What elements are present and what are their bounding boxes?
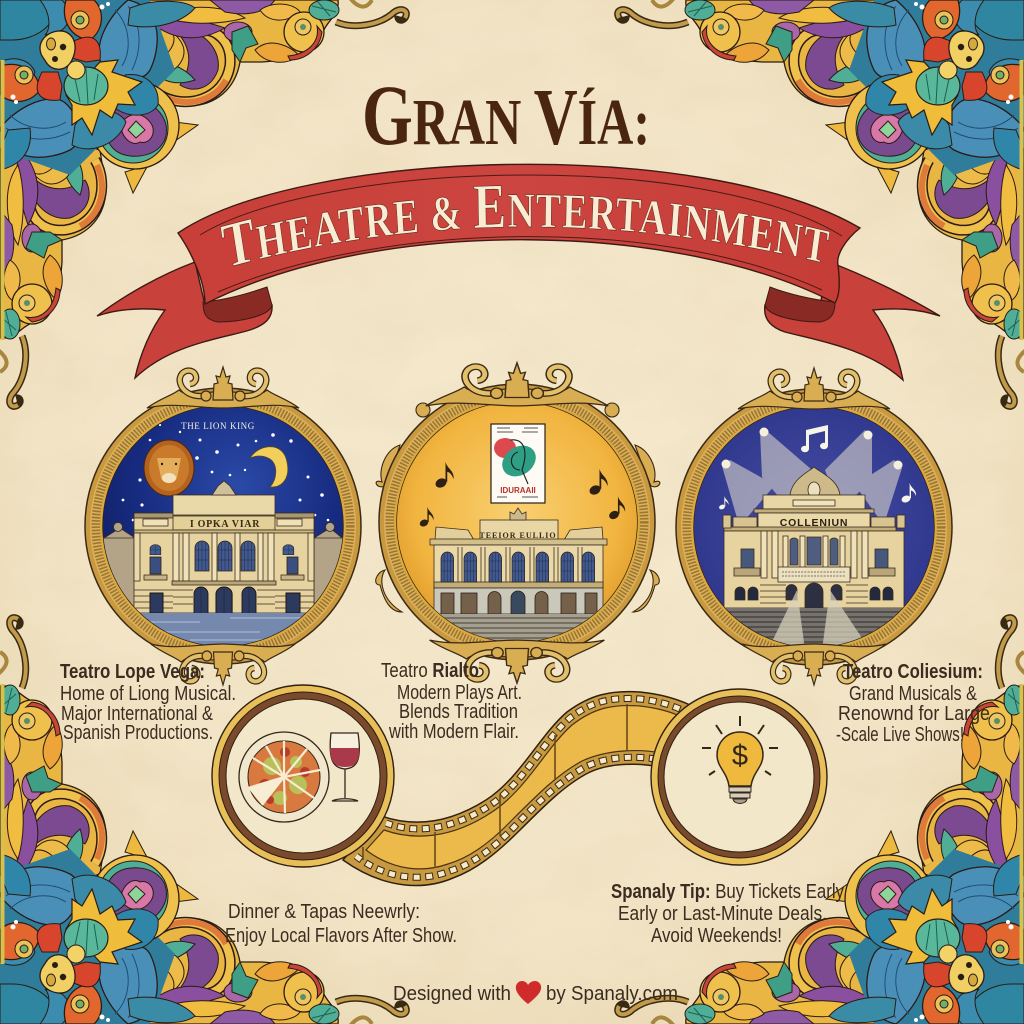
text: Teatro Lope Vega: Spanish Productions. bbox=[63, 722, 213, 744]
text: Teatro Rialto: with Modern Flair. bbox=[388, 721, 519, 743]
text: Teatro Coliesium: Renownd for Large bbox=[838, 703, 990, 725]
text: dinner and tapas: Dinner & Tapas Neewrly: bbox=[228, 901, 420, 923]
footer credit bbox=[393, 981, 678, 1005]
ornament: bottom-right corner bbox=[618, 618, 1024, 1024]
banner: main band bbox=[178, 164, 860, 304]
facade sign: TEEIOR EULLIO bbox=[479, 531, 557, 540]
footer credit: Designed with bbox=[393, 983, 511, 1005]
scene: amber sky with poster and theatre bbox=[395, 400, 640, 649]
text: Teatro Coliesium: Grand Musicals & bbox=[849, 683, 978, 705]
text: Spanaly tip: Early or Last-Minute Deals. bbox=[618, 903, 827, 925]
white music notes bbox=[718, 425, 916, 510]
side buildings bbox=[100, 522, 349, 613]
forecourt bbox=[140, 613, 306, 644]
crown bottom bbox=[430, 640, 604, 683]
stairs bbox=[440, 614, 594, 640]
text: Teatro Coliesium: -Scale Live Shows! bbox=[836, 724, 964, 746]
text: Spanaly tip: Avoid Weekends! bbox=[651, 925, 782, 947]
stairs and light bbox=[726, 590, 902, 645]
text: Teatro Lope Vega bbox=[60, 661, 236, 744]
crown top bbox=[426, 363, 608, 406]
medallion: Teatro Rialto bbox=[376, 363, 660, 683]
crown bottom bbox=[742, 644, 886, 685]
icon: pizza plate bbox=[239, 732, 329, 822]
scene: lion king night sky and theatre bbox=[103, 408, 343, 644]
banner: right tail bbox=[765, 262, 940, 380]
icon: dollar light bulb bbox=[702, 716, 778, 804]
medallion: Teatro Lope de Vega bbox=[85, 367, 361, 685]
text: Teatro Lope Vega: Home of Liong Musical. bbox=[60, 683, 236, 705]
crown top bbox=[147, 367, 299, 408]
text: Teatro Coliesium: Teatro Coliesium: bbox=[843, 661, 983, 683]
title: GRAN VÍA: bbox=[362, 67, 650, 163]
tip circle bbox=[651, 689, 827, 865]
frame dividers bbox=[363, 704, 627, 868]
icon: dollar light bulb: $ bbox=[732, 740, 748, 772]
theatre facade bbox=[430, 508, 607, 614]
film strip bbox=[343, 692, 690, 885]
text: dinner and tapas bbox=[225, 901, 457, 947]
music notes bbox=[419, 462, 625, 528]
ornament: top-right corner bbox=[618, 0, 1024, 406]
lion head bbox=[144, 440, 194, 496]
text: Spanaly tip: Spanaly Tip: Buy Tickets Early bbox=[611, 881, 844, 903]
poster caption: THE LION KING bbox=[181, 421, 255, 431]
text: Teatro Coliesium bbox=[836, 661, 990, 746]
banner ribbon bbox=[96, 164, 940, 382]
icon: wine glass bbox=[330, 733, 359, 801]
facade sign: COLLENIUN bbox=[780, 517, 848, 529]
scene: spotlights and theatre bbox=[694, 408, 934, 645]
spotlight beams bbox=[722, 430, 902, 520]
side flourishes bbox=[376, 403, 660, 612]
ornament: bottom-left corner bbox=[0, 618, 406, 1024]
crown top bbox=[738, 368, 890, 409]
text: dinner and tapas: Enjoy Local Flavors After Show. bbox=[225, 925, 457, 947]
text: Teatro Rialto: Modern Plays Art. bbox=[397, 682, 522, 704]
crown bottom bbox=[151, 644, 295, 685]
film perforations bbox=[386, 699, 684, 829]
text: Teatro Lope Vega: Teatro Lope Vega: bbox=[60, 661, 205, 683]
banner: left tail bbox=[97, 262, 272, 378]
footer credit: by Spanaly.com bbox=[546, 983, 678, 1005]
dinner circle bbox=[212, 685, 394, 867]
text: Spanaly tip bbox=[611, 881, 844, 947]
poster: IDURAAII bbox=[500, 486, 536, 495]
icon: heart bbox=[516, 981, 541, 1004]
medallion: Teatro Coliseum bbox=[676, 368, 952, 685]
text: Teatro Lope Vega: Major International & bbox=[61, 703, 214, 725]
crescent moon bbox=[250, 447, 288, 487]
text: Teatro Rialto: Blends Tradition bbox=[399, 701, 518, 723]
theatre facade bbox=[723, 467, 905, 608]
banner: fold shadows bbox=[203, 287, 835, 322]
poster bbox=[491, 424, 545, 503]
facade sign: I OPKA VIAR bbox=[190, 519, 260, 530]
text: Teatro Rialto: Teatro Rialto bbox=[381, 660, 479, 682]
ornament: top-left corner bbox=[0, 0, 406, 406]
banner: subtitle text: THEATRE & ENTERTAINMENT bbox=[220, 185, 830, 266]
text: Teatro Rialto bbox=[381, 660, 522, 743]
main theatre facade bbox=[134, 481, 314, 613]
